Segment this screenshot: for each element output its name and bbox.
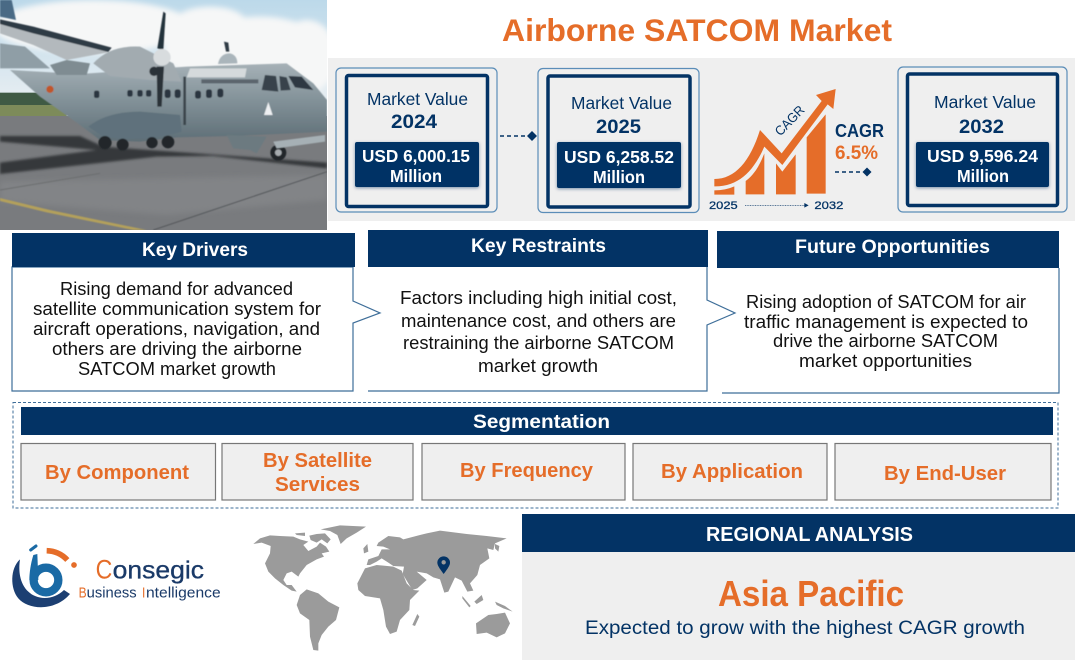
text: key restraints body: maintenance cost, and others are [401,311,676,331]
text: company name: B [79,586,87,602]
heading: key restraints [368,230,708,267]
segment: by application: By Application [661,460,803,483]
segment: by end-user: By End-User [884,462,1006,485]
heading: key restraints: Key Restraints [471,235,606,257]
segment: by satellite services [222,444,413,500]
text: key drivers body: Rising demand for advanced [60,279,293,299]
heading: key drivers: Key Drivers [142,239,248,261]
text: key restraints body [400,288,677,376]
icon: location pin [437,556,450,574]
text: future opportunities body: market opportunities [799,351,972,371]
heading: regional analysis: REGIONAL ANALYSIS [706,524,913,546]
text: key drivers body: satellite communication system for [33,299,321,319]
text: company name: usiness [87,586,137,602]
text: key drivers body: aircraft operations, navigation, and [33,319,320,339]
card: market value 2024: Million [390,166,442,186]
text: company name: C [96,554,112,584]
text: regional growth note: Expected to grow with the highest CAGR growth [585,617,1025,639]
heading: future opportunities [717,231,1059,268]
photo: military transport aircraft on tarmac [0,0,337,230]
text: key restraints body: restraining the airborne SATCOM [403,333,674,353]
segment: by application [633,444,827,500]
connector: 2024 to 2025 [500,131,537,141]
text: key drivers body: SATCOM market growth [78,359,276,379]
text: key restraints body: Factors including high initial cost, [400,288,677,308]
label: CAGR 6.5%: CAGR [835,121,884,141]
text: key drivers body: others are driving the airborne [52,339,302,359]
text: future opportunities body: Rising adoption of SATCOM for air [746,292,1026,312]
heading: regional analysis [522,514,1075,552]
card: market value 2024 [336,68,497,212]
segment: by frequency: By Frequency [460,459,594,482]
panel: key drivers [12,233,380,391]
card: market value 2025: Market Value [571,93,672,113]
panel: future opportunities [717,231,1059,393]
text: future opportunities body: drive the airborne SATCOM [773,331,998,351]
card: market value 2032: USD 9,596.24 [927,146,1038,166]
world map [253,525,513,651]
card: market value 2032: Million [957,166,1009,186]
segment: by satellite services: By Satellite [263,449,372,472]
heading: future opportunities: Future Opportunities [795,236,990,258]
card: market value 2032 [898,67,1067,212]
heading: segmentation: Segmentation [473,411,610,433]
icon: logo mark [12,546,77,607]
text: key drivers body [33,279,321,379]
text: future opportunities body: traffic management is expected to [744,312,1028,332]
card: market value 2024: USD 6,000.15 [362,146,470,166]
chart: CAGR growth arrow: 2025 [709,200,738,212]
card: market value 2024: 2024 [391,111,437,133]
card: market value 2025: USD 6,258.52 [564,147,674,167]
card: market value 2024: Market Value [367,89,468,109]
card: market value 2025 [538,68,699,212]
text: key restraints body: market growth [478,356,598,376]
segment: by frequency [422,444,625,500]
heading: segmentation [21,407,1053,435]
panel: regional analysis [522,514,1075,660]
text: company name [79,554,221,602]
label: CAGR 6.5%: 6.5% [835,143,878,164]
segment: by end-user [835,444,1051,500]
card: market value 2025: Million [593,167,645,187]
text: company name: onsegic [113,556,204,584]
title: Airborne SATCOM Market [502,12,893,48]
panel: market value band [328,58,1075,221]
panel: key restraints [368,230,735,391]
card: market value 2032: 2032 [959,116,1004,138]
segment: by component: By Component [45,461,189,484]
label: CAGR 6.5% [835,121,884,176]
panel: segmentation [13,402,1058,508]
text: company name: I [142,586,145,602]
text: company name: ntelligence [146,586,221,602]
card: market value 2025: 2025 [596,116,641,138]
segment: by satellite services: Services [275,473,360,496]
chart: CAGR growth arrow: 2032 [814,200,843,212]
chart: CAGR growth arrow: CAGR [772,102,807,139]
heading: key drivers [12,233,355,267]
text: Asia Pacific: Asia Pacific [718,573,904,614]
segment: by component [21,444,216,500]
text: future opportunities body [744,292,1028,371]
chart: CAGR growth arrow [709,89,843,212]
card: market value 2032: Market Value [934,92,1036,112]
logo: Consegic Business Intelligence [12,546,221,607]
